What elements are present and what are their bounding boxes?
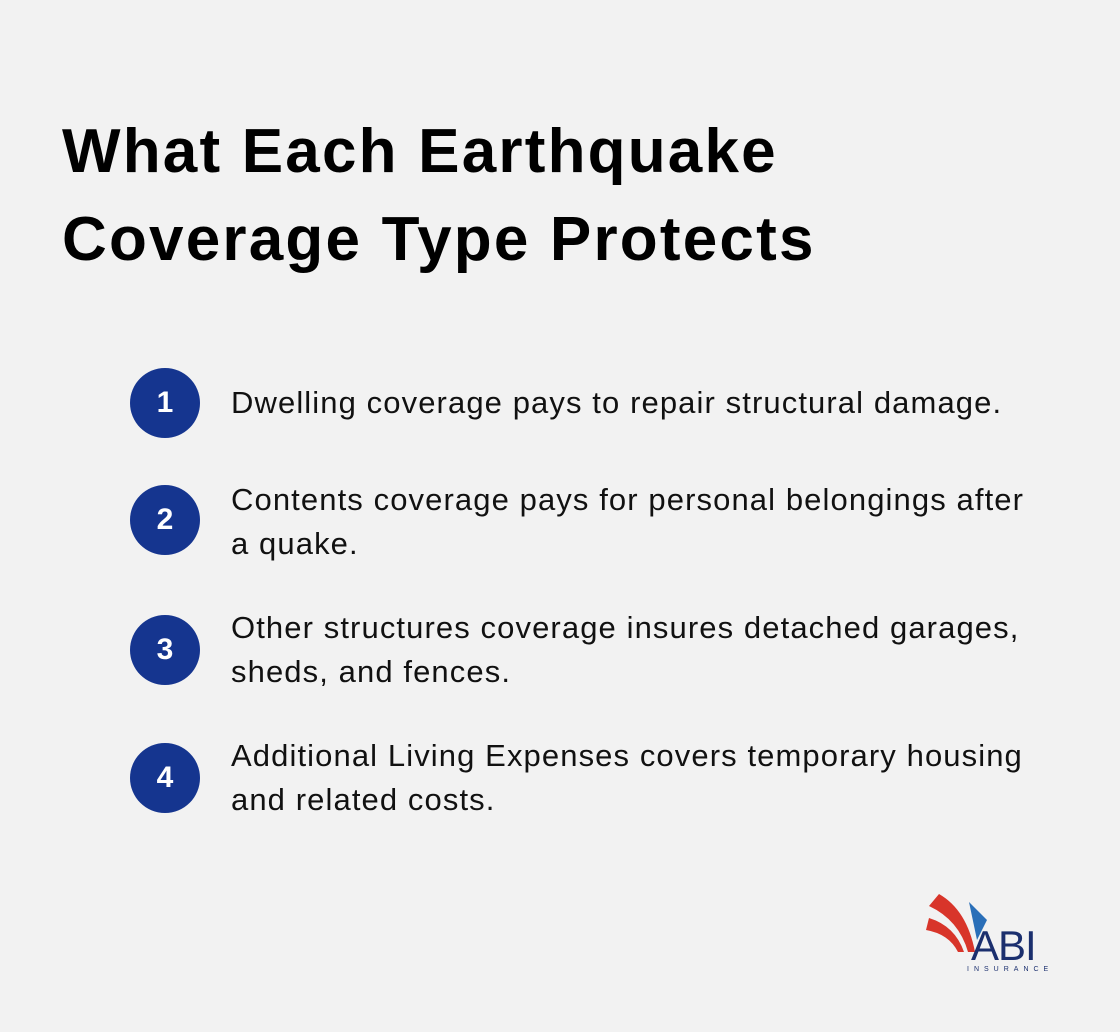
logo (926, 894, 1053, 972)
item 3: sheds, and fences. (231, 654, 511, 689)
item 2: a quake. (231, 526, 359, 561)
title (62, 117, 816, 274)
item 3: 3 (157, 633, 173, 666)
title: Coverage Type Protects (62, 205, 816, 274)
item 1 (130, 368, 1002, 438)
item 3 (130, 610, 1019, 689)
item 4: and related costs. (231, 782, 496, 817)
item 3: Other structures coverage insures detached garages, (231, 610, 1019, 645)
item 4: 4 (157, 761, 173, 794)
item 2 (130, 482, 1024, 561)
item 1: Dwelling coverage pays to repair structural damage. (231, 385, 1002, 420)
logo: ABI (971, 922, 1036, 969)
item 1: 1 (157, 386, 173, 419)
item 4 (130, 738, 1023, 817)
item 2: Contents coverage pays for personal belongings after (231, 482, 1024, 517)
item 2: 2 (157, 503, 173, 536)
title: What Each Earthquake (62, 117, 778, 186)
item 4: Additional Living Expenses covers temporary housing (231, 738, 1023, 773)
